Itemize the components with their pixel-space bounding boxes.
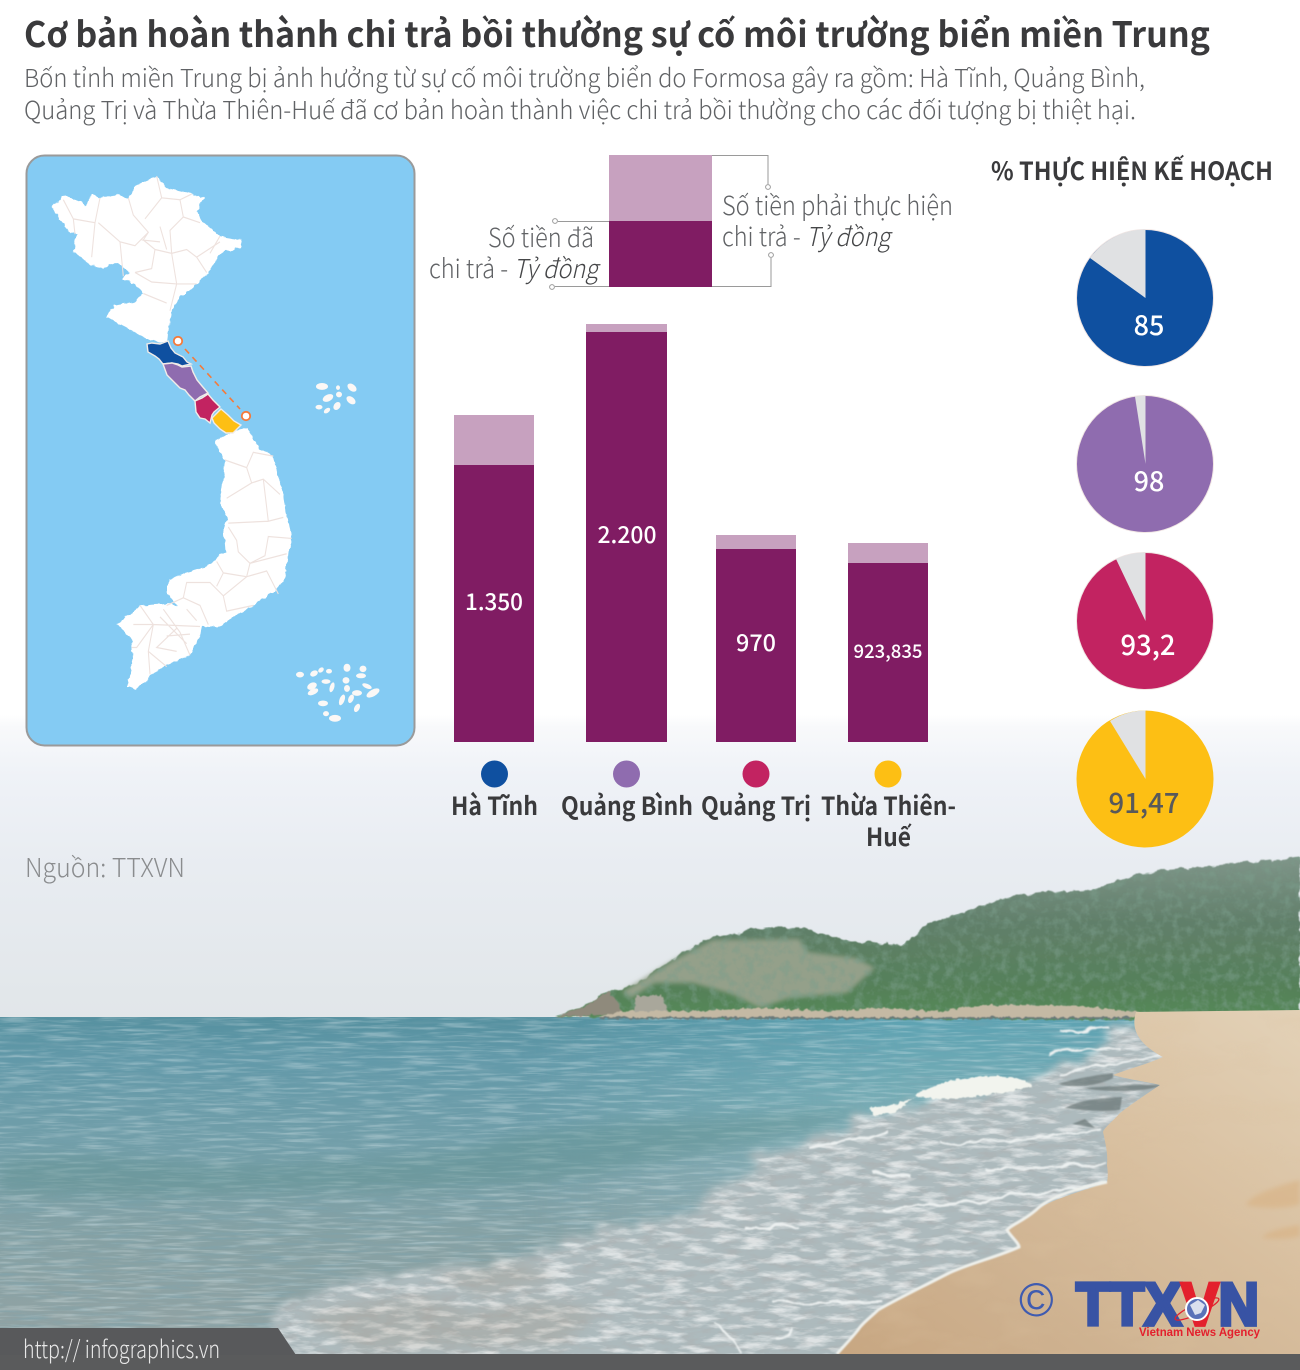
province key: Quảng Bình: Quảng Bình xyxy=(561,787,693,823)
pie: Quảng Bình 98%: 98 xyxy=(1134,460,1164,499)
legend bar: amount paid xyxy=(609,221,712,287)
copyright symbol: © xyxy=(1019,1273,1054,1326)
intro text: Bốn tỉnh miền Trung bị ảnh hưởng từ sự cố môi trường biển do Formosa gây ra gồm: Hà Tĩnh, Quảng Bình, xyxy=(24,59,1145,95)
rocky shore xyxy=(555,992,1150,1019)
province key: Thừa Thiên-Huế: Thừa Thiên- xyxy=(821,787,956,823)
Quảng Trị province xyxy=(195,394,220,423)
sand xyxy=(830,1010,1300,1356)
province borders xyxy=(63,176,292,674)
map sea background xyxy=(26,156,414,746)
logo: TTXVN Vietnam News Agency: TTXVN xyxy=(1076,1271,1259,1338)
surf lines xyxy=(712,1028,1163,1353)
legend bar: amount required xyxy=(609,155,712,221)
pie: Hà Tĩnh 85% xyxy=(1076,230,1214,366)
bar: Quảng Trị: 970 xyxy=(736,624,776,658)
mainland south xyxy=(118,428,292,690)
legend text: paid: chi trả - Tỷ đồng xyxy=(429,249,601,286)
foam on the shoreline xyxy=(268,1019,1163,1354)
pie: Thừa Thiên-Huế 91,47% xyxy=(1076,710,1214,848)
website url: http:// infographics.vn xyxy=(23,1330,220,1365)
bar: Quảng Bình xyxy=(586,324,667,742)
pie: Quảng Trị 93,2% xyxy=(1076,552,1214,690)
legend text: required xyxy=(722,186,953,254)
legend text: paid xyxy=(429,218,601,286)
globe emblem xyxy=(1173,1294,1221,1324)
province key: Quảng Bình xyxy=(561,760,693,823)
Spratly islands xyxy=(296,664,381,722)
pie: Quảng Bình 98% xyxy=(1076,396,1214,532)
logo: TTXVN Vietnam News Agency: Vietnam News Agency xyxy=(1139,1325,1260,1339)
province key: Thừa Thiên-Huế xyxy=(821,760,956,854)
pie: Thừa Thiên-Huế 91,47%: 91,47 xyxy=(1108,782,1180,822)
title: Cơ bản hoàn thành chi trả bồi thường sự cố môi trường biển miền Trung xyxy=(24,7,1210,58)
sea xyxy=(0,1017,1136,1328)
Thừa Thiên-Huế province xyxy=(212,409,241,433)
pie: Hà Tĩnh 85%: 85 xyxy=(1134,304,1164,343)
sky fade xyxy=(0,715,1300,1020)
bar: Thừa Thiên-Huế: 923,835 xyxy=(854,637,922,664)
white wave crest xyxy=(870,1076,1032,1116)
water edge xyxy=(837,1182,1107,1354)
legend: bar chart key xyxy=(429,155,953,289)
bar: Quảng Bình: 2.200 xyxy=(598,516,656,550)
hills xyxy=(550,850,1300,1020)
intro text: Quảng Trị và Thừa Thiên-Huế đã cơ bản hoàn thành việc chi trả bồi thường cho các đối tượng bị thiệt hại. xyxy=(24,91,1136,127)
province key: Hà Tĩnh: Hà Tĩnh xyxy=(451,787,538,823)
legend text: paid: Số tiền đã xyxy=(488,218,594,255)
bar: Hà Tĩnh xyxy=(454,415,534,742)
bar: Thừa Thiên-Huế xyxy=(848,543,928,742)
source note: Nguồn: TTXVN xyxy=(25,848,185,885)
leader lines xyxy=(550,156,773,289)
Paracel islands xyxy=(316,382,358,415)
province key: Hà Tĩnh xyxy=(451,760,538,823)
mainland xyxy=(52,176,292,690)
bar: Hà Tĩnh: 1.350 xyxy=(465,583,523,617)
footer tab xyxy=(0,1328,296,1355)
intro text xyxy=(24,59,1145,127)
Quảng Bình province xyxy=(163,363,208,401)
mainland north xyxy=(52,176,242,343)
panel: map of Vietnam xyxy=(26,156,414,746)
breaking swell xyxy=(0,1110,865,1197)
province key: Thừa Thiên-Huế: Huế xyxy=(866,818,912,854)
pie charts heading: % THỰC HIỆN KẾ HOẠCH xyxy=(991,152,1273,188)
pie: Quảng Trị 93,2%: 93,2 xyxy=(1120,624,1176,664)
province key: Quảng Trị: Quảng Trị xyxy=(701,787,811,823)
dashed coastline marker xyxy=(174,337,250,420)
background photo: beach, sea and hills xyxy=(0,715,1300,1370)
Hà Tĩnh province xyxy=(147,341,191,366)
wet sand shadows xyxy=(1058,1073,1160,1128)
brown patches in the shallows xyxy=(300,1262,600,1350)
bar: Quảng Trị xyxy=(716,535,796,742)
province key: Quảng Trị xyxy=(701,760,811,823)
bar chart: compensation by province xyxy=(454,324,928,742)
legend text: required: chi trả - Tỷ đồng xyxy=(722,217,893,254)
legend text: required: Số tiền phải thực hiện xyxy=(722,186,953,223)
bottom footer bar xyxy=(0,1328,1300,1370)
bare hillside xyxy=(622,939,875,1008)
